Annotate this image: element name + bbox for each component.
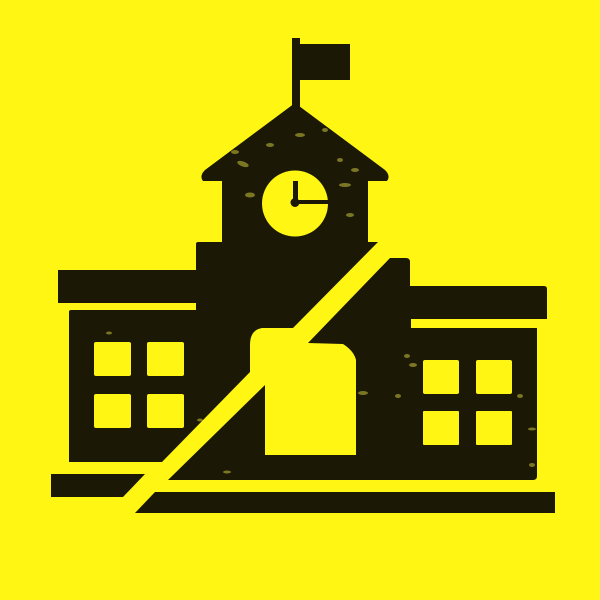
bottom-left step [51, 474, 145, 497]
school building [51, 38, 555, 513]
icon: flag [292, 38, 350, 108]
right wing windows [423, 360, 512, 445]
lower-right building section with right wing [168, 258, 547, 480]
left wing windows [94, 342, 184, 428]
icon: clock [262, 170, 328, 236]
bottom base step [135, 492, 555, 513]
upper-left building section with tower, roof and left wing [58, 103, 389, 462]
worn print speckles [106, 128, 536, 474]
